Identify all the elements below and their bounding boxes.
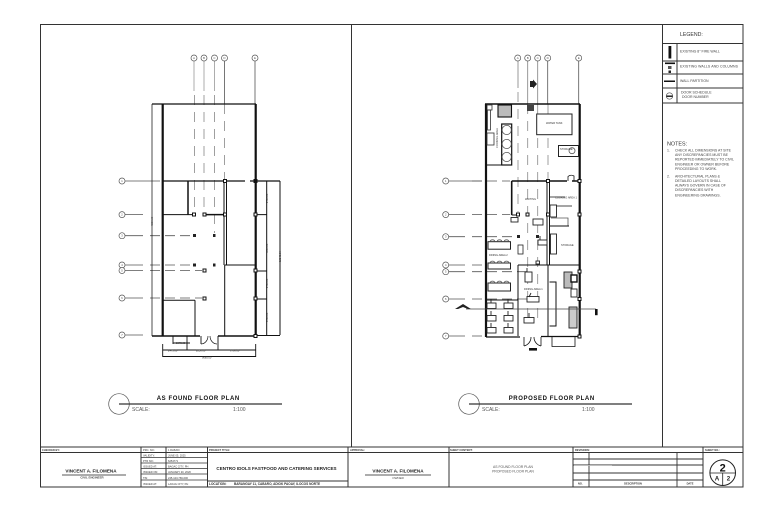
icon: walls and column — [665, 62, 675, 73]
top grid bubbles and lines: D — [547, 56, 550, 60]
sheet number badge: 2 — [727, 476, 731, 482]
side grid bubbles and lines: 1 — [121, 179, 123, 183]
icon: door schedule — [666, 93, 673, 99]
sheet number badge: SHEET NO.: — [705, 448, 720, 452]
dining tables: DINING AREA 2 — [489, 253, 508, 257]
notes: REPORTED IMMEDIATELY TO CIVIL — [675, 158, 734, 162]
water tank — [537, 114, 572, 135]
revisions: DESCRIPTION — [624, 482, 642, 486]
icon: wall partition — [664, 80, 675, 82]
panel: as-found floor plan — [109, 55, 282, 414]
notes: NOTES: — [667, 142, 687, 148]
project data table: ISSUED AT: — [143, 482, 157, 486]
plan title: as found floor plan: SCALE: — [132, 407, 150, 413]
storage and kitchen fixtures — [550, 196, 577, 328]
project data table: VALIDITY: — [143, 454, 155, 458]
project data table: ISSUED AT: — [143, 464, 157, 468]
dimensions: 4000.00 — [265, 243, 269, 253]
side grid bubbles and lines: 1 — [445, 179, 447, 183]
side grid bubbles and lines: 6 — [121, 296, 123, 300]
side grid bubbles and lines: 4 — [121, 263, 123, 267]
dimensions: 2700.00 — [265, 278, 269, 288]
panel: legend: LEGEND: — [680, 32, 703, 38]
dimensions — [150, 193, 282, 360]
side grid bubbles and lines: 5 — [121, 268, 123, 272]
sheet number badge: 2 — [720, 462, 726, 474]
septic unit — [558, 146, 578, 156]
engineer block: VINCENT A. FILOMENA — [65, 468, 117, 474]
project data table: JUNE 05, 2025 — [168, 454, 186, 458]
top grid bubbles and lines: B — [527, 56, 529, 60]
dimensions: 3700.00 — [265, 312, 269, 322]
plan title: proposed floor plan: 1:100 — [582, 407, 595, 413]
project data table: 6254771 — [168, 459, 179, 463]
side grid bubbles and lines: 6 — [445, 297, 447, 301]
icon: fire wall — [668, 46, 671, 58]
notes: ARCHITECTURAL PLANS & — [675, 174, 721, 178]
storage and kitchen fixtures: STORAGE — [561, 243, 574, 247]
project title — [209, 448, 337, 486]
project title: CENTRO IDOLS FASTFOOD AND CATERING SERVICES — [216, 466, 337, 471]
notes: ALWAYS GOVERN IN CASE OF — [675, 184, 726, 188]
approval: APPROVAL: — [350, 448, 365, 452]
notes: PROCEEDING TO WORK. — [675, 167, 717, 171]
top grid bubbles and lines: A — [193, 56, 195, 60]
project data table — [143, 448, 191, 486]
panel: legend: DOOR SCHEDULE — [681, 90, 712, 94]
title block — [40, 447, 743, 487]
sheet number badge — [705, 448, 736, 486]
panel: legend: EXISTING 8" FIRE WALL — [680, 50, 720, 54]
sheet number badge: A — [715, 476, 720, 482]
dimensions: 2075.00 — [176, 341, 186, 345]
panel: legend: WALL PARTITION — [680, 79, 709, 83]
side grid bubbles and lines: 2 — [445, 213, 447, 217]
building walls — [485, 104, 580, 346]
plan title: proposed floor plan: PROPOSED FLOOR PLAN — [509, 396, 594, 402]
top grid bubbles and lines: E — [578, 56, 580, 60]
top grid bubbles and lines: A — [517, 56, 519, 60]
dimensions: 2475.00 — [168, 348, 178, 352]
project data table: PTR NO.: — [143, 459, 155, 463]
engineer block — [42, 448, 126, 480]
dimensions: 2700.00 — [265, 193, 269, 203]
building walls — [152, 104, 280, 350]
approval: VINCENT A. FILOMENA — [372, 468, 424, 474]
side grid bubbles and lines: 7 — [445, 334, 447, 338]
project data table: JANUARY 20, 2020 — [168, 470, 191, 474]
notes: DISCREPANCIES WITH — [675, 188, 714, 192]
project title: PROJECT TITLE: — [209, 448, 230, 452]
sheet content — [450, 448, 534, 474]
top grid bubbles and lines: E — [254, 56, 256, 60]
centre tables — [511, 197, 547, 323]
storage and kitchen fixtures: COOKING AREA 1 — [555, 196, 577, 200]
side grid bubbles and lines — [119, 178, 202, 338]
plan title: proposed floor plan: SCALE: — [482, 407, 500, 413]
plan title: as found floor plan: 1:100 — [233, 407, 246, 413]
project title: BARANGAY 11, CABARO, ADIOK PAOAY, ILOCOS NORTE — [234, 482, 320, 486]
septic unit: STORAGE — [560, 147, 573, 151]
water tank: WATER TANK — [546, 121, 563, 125]
engineer block: CHECKED BY: — [42, 448, 60, 452]
top grid bubbles and lines — [515, 55, 582, 320]
dining tables — [488, 240, 523, 291]
notes: ANY DISCREPANCIES MUST BE — [675, 153, 729, 157]
notes: ENGINEER OR OWNER BEFORE — [675, 162, 730, 166]
columns — [516, 180, 581, 338]
revisions: NO. — [578, 482, 583, 486]
plan title: as found floor plan — [109, 394, 282, 414]
sheet content: AS FOUND FLOOR PLAN — [493, 465, 534, 469]
dimensions: 4500.00 — [150, 216, 154, 226]
notes: CHECK ALL DIMENSIONS AT SITE — [675, 148, 732, 152]
engineer block: CIVIL ENGINEER — [80, 476, 105, 480]
panel: legend: DOOR NUMBER — [682, 95, 709, 99]
project data table: PRC. NO.: — [143, 448, 156, 452]
kitchen equipment block: COOKING AREA — [495, 128, 499, 148]
side grid bubbles and lines — [443, 178, 528, 339]
panel: legend — [662, 32, 743, 103]
side grid bubbles and lines: 7 — [121, 333, 123, 337]
project data table: TIN: — [143, 476, 148, 480]
revisions: DATE — [687, 482, 694, 486]
top grid bubbles and lines: D — [223, 56, 226, 60]
plan title: as found floor plan: AS FOUND FLOOR PLAN — [157, 396, 239, 402]
dimensions: 3760.00 — [230, 348, 240, 352]
project data table: LAOAG CITY, PH — [168, 482, 188, 486]
side grid bubbles and lines: 3 — [445, 235, 447, 239]
dimensions: 12545.00 — [278, 251, 282, 262]
project data table: 245-123-769-000 — [168, 476, 188, 480]
top grid bubbles and lines: C — [537, 56, 540, 60]
centre tables: WAITING — [525, 197, 536, 201]
columns — [192, 179, 258, 338]
section line marker — [455, 304, 598, 351]
approval — [350, 448, 431, 480]
side grid bubbles and lines: 3 — [121, 234, 123, 238]
small booth tables — [487, 299, 513, 333]
notes: ENGINEERING DRAWINGS. — [675, 194, 721, 198]
top grid bubbles and lines — [191, 55, 258, 233]
side grid bubbles and lines: 5 — [445, 270, 447, 274]
plan title: proposed floor plan — [459, 394, 632, 414]
sheet content: SHEET CONTENT: — [450, 448, 473, 452]
project data table: ISSUED ON: — [143, 470, 158, 474]
notes: DETAILED LAYOUTS SHALL — [675, 179, 721, 183]
side grid bubbles and lines: 4 — [445, 263, 447, 267]
project data table: BAGAC CITY, PH — [168, 464, 189, 468]
revisions — [575, 448, 694, 486]
revisions: REVISIONS: — [575, 448, 590, 452]
sheet content: PROPOSED FLOOR PLAN — [492, 470, 534, 474]
kitchen equipment block — [487, 105, 534, 165]
project data table: 1 RLB200 — [168, 448, 180, 452]
panel: legend: EXISTING WALLS AND COLUMNS — [680, 64, 739, 68]
centre tables: DINING AREA 1 — [524, 287, 543, 291]
approval: OWNER — [392, 476, 405, 480]
notes — [667, 142, 734, 198]
notes: 1. — [667, 148, 670, 152]
project title: LOCATION: — [209, 482, 226, 486]
top grid bubbles and lines: C — [213, 56, 216, 60]
notes: 2. — [667, 174, 670, 178]
dimensions: 2850.00 — [196, 348, 206, 352]
side grid bubbles and lines: 2 — [121, 213, 123, 217]
panel: proposed floor plan — [443, 55, 632, 414]
top grid bubbles and lines: B — [203, 56, 205, 60]
dimensions: 9085.00 — [202, 356, 212, 360]
